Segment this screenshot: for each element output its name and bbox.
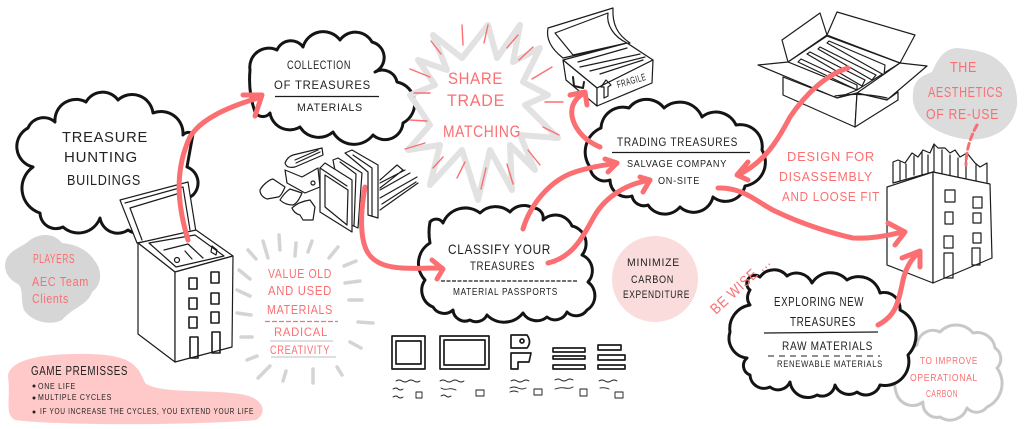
text: value old and used materials: AND USED <box>268 283 332 298</box>
arrow: exploring to building <box>878 251 920 325</box>
text: value old and used materials: MATERIALS <box>267 302 333 317</box>
text: exploring new treasures: TREASURES <box>790 314 856 329</box>
text: collection of treasures: MATERIALS <box>297 102 363 114</box>
text: design for disassembly and loose fit: DESIGN FOR <box>787 149 875 164</box>
text: minimize carbon expenditure: EXPENDITURE <box>623 289 690 301</box>
text: exploring new treasures: EXPLORING NEW <box>774 294 864 309</box>
text: classify your treasures: MATERIAL PASSPORTS <box>453 287 558 298</box>
text: to improve operational carbon: OPERATIONAL <box>910 373 978 384</box>
icon: treasure chest <box>548 8 653 106</box>
text: trading treasures <box>612 135 750 187</box>
text: share trade matching <box>443 69 521 141</box>
text: share trade matching: SHARE <box>448 69 503 88</box>
icon: building with open lid <box>120 182 233 362</box>
text: to improve operational carbon: TO IMPROVE <box>920 356 978 367</box>
heading: treasure hunting buildings: HUNTING <box>64 149 138 166</box>
text: exploring new treasures: RENEWABLE MATERIALS <box>777 359 883 369</box>
panel: material passports icons <box>392 335 625 398</box>
text: design for disassembly and loose fit: AND LOOSE FIT <box>782 189 880 204</box>
icon: open cardboard box <box>758 12 927 127</box>
arrow: box to trading <box>737 68 848 180</box>
panel: aesthetics of re-use <box>913 48 1017 165</box>
text: trading treasures: SALVAGE COMPANY <box>627 159 727 170</box>
label: be wise: BE WISE ... <box>707 254 774 318</box>
icon: salvaged toilets frames and beams <box>260 148 418 232</box>
text: collection of treasures: OF TREASURES <box>274 78 371 92</box>
text: premises <box>31 363 254 416</box>
heading: treasure hunting buildings: BUILDINGS <box>67 172 141 189</box>
red rays <box>405 25 563 189</box>
heading: treasure hunting buildings <box>62 129 148 189</box>
text: minimize carbon expenditure: MINIMIZE <box>627 257 680 269</box>
panel: value old and used materials <box>237 235 373 383</box>
heading: treasure hunting buildings: TREASURE <box>62 129 148 146</box>
panel: players <box>5 235 100 323</box>
text: minimize carbon expenditure <box>623 257 690 301</box>
text: value old and used materials: CREATIVITY <box>270 343 330 357</box>
cloud: treasure hunting buildings <box>17 92 198 233</box>
text: trading treasures: TRADING TREASURES <box>617 135 738 149</box>
text: players list: PLAYERS <box>33 251 75 266</box>
cloud: collection of treasures <box>250 32 415 144</box>
text: exploring new treasures: RAW MATERIALS <box>782 339 873 353</box>
text: value old and used materials: VALUE OLD <box>268 266 332 281</box>
icon: building with crown <box>887 144 992 283</box>
panel: game premises <box>8 354 263 424</box>
text: premises: MULTIPLE CYCLES <box>38 393 112 402</box>
text: to improve operational carbon: CARBON <box>926 389 958 400</box>
arrow: trading to building <box>718 188 905 245</box>
text: collection of treasures <box>274 58 379 114</box>
windows <box>944 190 982 278</box>
text: aesthetics of re-use <box>926 59 1003 123</box>
text: trading treasures: ON-SITE <box>658 176 700 187</box>
text: value old and used materials: RADICAL <box>274 325 328 339</box>
scribble captions <box>393 379 623 398</box>
text: aesthetics of re-use: THE <box>950 59 977 76</box>
text: classify your treasures <box>441 241 577 298</box>
text: classify your treasures: TREASURES <box>470 259 535 273</box>
text: players list <box>32 251 89 306</box>
text: exploring new treasures <box>764 294 883 369</box>
cloud: to improve operational carbon <box>894 325 1002 420</box>
panel: minimize carbon expenditure <box>612 236 698 322</box>
arrow: classify to trading two <box>548 177 650 263</box>
cloud: trading treasures <box>585 99 765 214</box>
text: share trade matching: TRADE <box>447 91 505 110</box>
cloud: exploring new treasures <box>729 270 916 398</box>
panel: share trade matching burst <box>405 25 563 200</box>
cloud: classify your treasures <box>418 205 595 322</box>
arrow: classify to trading one <box>523 159 617 229</box>
text: value old and used materials <box>265 266 338 357</box>
text: share trade matching: MATCHING <box>443 122 521 141</box>
text: minimize carbon expenditure: CARBON <box>631 274 674 286</box>
text: classify your treasures: CLASSIFY YOUR <box>448 241 551 257</box>
arrow: hunting to collection <box>179 95 262 240</box>
windows <box>189 272 220 358</box>
text: premises: ONE LIFE <box>38 382 76 391</box>
arrow: collection to classify <box>362 187 443 279</box>
text: collection of treasures: COLLECTION <box>287 58 351 72</box>
label: fragile: FRAGILE <box>616 72 648 91</box>
text: design for disassembly and loose fit <box>779 149 880 204</box>
text: premises: IF YOU INCREASE THE CYCLES, YOU EXTEND YOUR LIFE <box>40 407 254 416</box>
text: to improve operational carbon <box>910 356 978 400</box>
text: premises: GAME PREMISSES <box>31 363 128 378</box>
text: design for disassembly and loose fit: DISASSEMBLY <box>779 169 873 184</box>
text: players list: AEC Team <box>32 274 89 289</box>
rays <box>237 235 373 383</box>
text: players list: Clients <box>32 291 69 306</box>
arrow: trading to chest <box>570 92 600 147</box>
text: aesthetics of re-use: OF RE-USE <box>926 106 999 123</box>
